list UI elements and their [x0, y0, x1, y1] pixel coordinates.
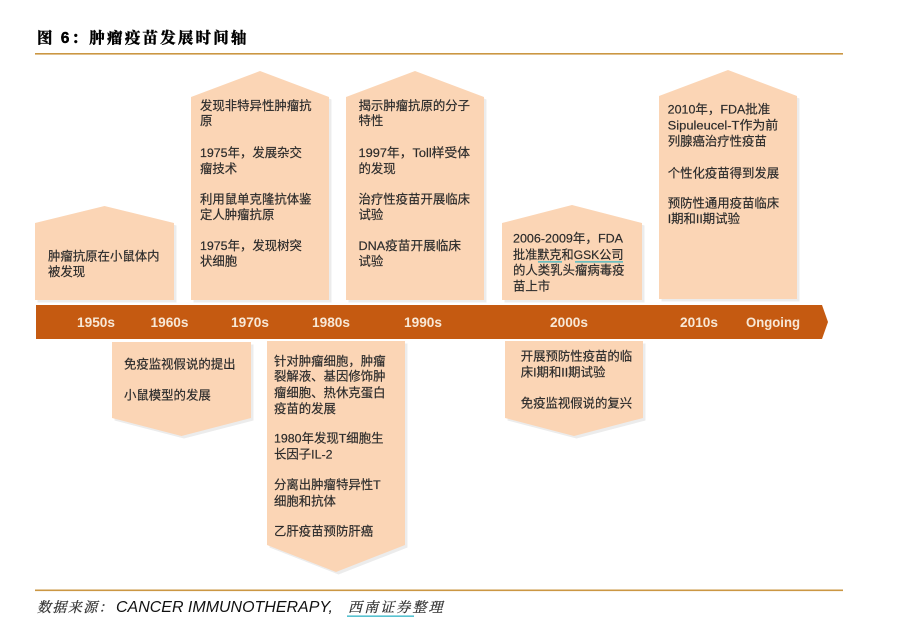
panel: 2010s: Sipuleucel-T作为前	[668, 118, 778, 133]
source note: CANCER IMMUNOTHERAPY,	[116, 599, 333, 616]
panel: 1990s: 揭示肿瘤抗原的分子	[358, 98, 470, 113]
panel: 2000s lower	[505, 341, 646, 438]
panel: 1950s: 被发现	[48, 264, 85, 279]
panel: 1970s: 发现非特异性肿瘤抗	[200, 98, 312, 113]
decade labels: 1960s	[150, 314, 189, 330]
decade labels: 1970s	[231, 314, 269, 330]
panel: 1990s: DNA疫苗开展临床	[358, 238, 461, 253]
panel: 1980s: 分离出肿瘤特异性T	[274, 477, 381, 492]
panel: 1990s	[346, 71, 486, 302]
panel: 2000s lower: 床I期和II期试验	[521, 364, 606, 379]
decade labels	[77, 314, 800, 330]
panel: 2010s	[659, 70, 800, 302]
timeline bar	[36, 305, 828, 339]
panel: 1970s	[191, 71, 332, 302]
panel: 1970s: 状细胞	[200, 254, 237, 268]
panel: 2010s: 个性化疫苗得到发展	[668, 165, 779, 180]
panel: 2010s: 预防性通用疫苗临床	[668, 195, 779, 210]
panel: 1990s: 试验	[358, 207, 384, 222]
panel: 2000s upper: 批准默克和GSK公司	[513, 247, 624, 262]
panel: 1970s: 利用鼠单克隆抗体鉴	[200, 192, 312, 206]
decade labels: 1980s	[312, 314, 350, 330]
panel: 1980s: 瘤细胞、热休克蛋白	[274, 385, 386, 400]
decade labels: 1950s	[77, 314, 115, 330]
panel: 1980s	[267, 341, 408, 574]
panel: 1980s: 乙肝疫苗预防肝癌	[274, 523, 373, 538]
panel: 1950s: 肿瘤抗原在小鼠体内	[48, 248, 160, 263]
panel: 1960s: 免疫监视假说的提出	[124, 356, 236, 371]
panel: 1990s: 的发现	[358, 161, 396, 176]
source note: 数据来源：	[37, 600, 114, 616]
panel: 2000s lower: 开展预防性疫苗的临	[521, 348, 632, 363]
panel: 1970s: 瘤技术	[200, 161, 237, 176]
panel: 1960s	[112, 342, 254, 438]
decade labels: Ongoing	[746, 314, 800, 330]
decade labels: 2010s	[680, 314, 718, 330]
panel: 1990s: 治疗性疫苗开展临床	[358, 192, 470, 206]
panel: 1970s: 1975年，发展杂交	[200, 145, 302, 160]
title: 图 6：肿瘤疫苗发展时间轴	[37, 28, 249, 47]
panel: 1990s: 试验	[358, 254, 384, 268]
source note	[37, 599, 445, 617]
panel: 2000s upper: 苗上市	[513, 278, 550, 294]
panel: 1990s: 特性	[358, 113, 383, 128]
panel: 1990s: 1997年，Toll样受体	[358, 145, 471, 160]
panel: 2000s lower: 免疫监视假说的复兴	[521, 395, 632, 410]
panel: 1970s: 1975年，发现树突	[200, 238, 302, 253]
panel: 1980s: 针对肿瘤细胞，肿瘤	[274, 353, 386, 368]
panel: 2010s: 列腺癌治疗性疫苗	[668, 133, 767, 148]
panel: 1980s: 疫苗的发展	[274, 401, 336, 416]
panel: 2000s upper: 的人类乳头瘤病毒疫	[513, 262, 625, 278]
panel: 1980s: 长因子IL-2	[274, 447, 333, 461]
panel: 1950s	[35, 206, 176, 302]
panel: 1980s: 1980年发现T细胞生	[274, 430, 383, 445]
panel: 1980s: 裂解液、基因修饰肿	[274, 368, 386, 383]
source note: 西南证券整理	[348, 600, 445, 616]
panel: 2000s upper: 2006-2009年，FDA	[513, 232, 624, 246]
panel: 1970s: 定人肿瘤抗原	[200, 207, 274, 222]
panel: 1960s: 小鼠模型的发展	[124, 387, 211, 402]
decade labels: 1990s	[404, 314, 442, 330]
panel: 2010s: I期和II期试验	[668, 211, 741, 226]
panel: 1980s: 细胞和抗体	[274, 493, 337, 508]
panel: 2010s: 2010年，FDA批准	[668, 102, 770, 117]
panel: 2000s upper	[502, 205, 644, 302]
panel: 1970s: 原	[200, 114, 212, 128]
decade labels: 2000s	[550, 314, 588, 330]
